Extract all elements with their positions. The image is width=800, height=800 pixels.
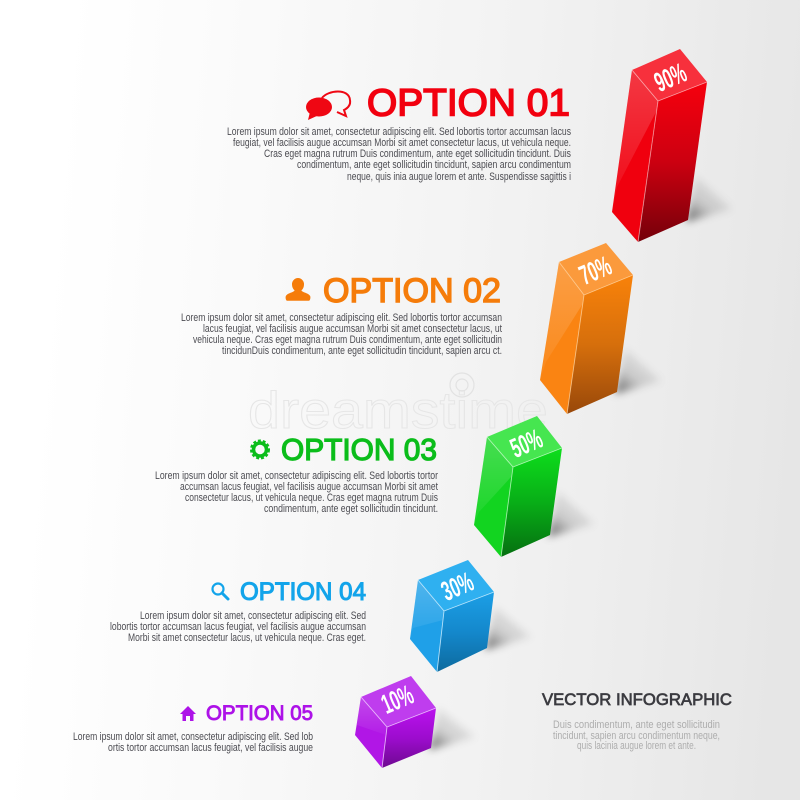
heading: option 03: OPTION 03 xyxy=(281,432,437,467)
text block: vector infographic: quis lacinia augue lorem et ante. xyxy=(577,740,696,752)
text block: option 02 xyxy=(181,312,502,357)
section: option 04 xyxy=(110,578,366,644)
bar: 30% blue xyxy=(410,560,531,672)
text block: option 02: tincidunDuis condimentum, ante eget sollicitudin tincidunt, sapien arcu ct. xyxy=(222,345,502,357)
label: 70%: 70% xyxy=(575,250,616,291)
text block: option 02: vehicula neque. Cras eget magna rutrum Duis condimentum, ante eget sollicitudin xyxy=(193,334,502,346)
section: option 05 xyxy=(73,702,313,754)
icon: house xyxy=(180,706,196,721)
heading: option 01: OPTION 01 xyxy=(367,82,570,124)
text block: vector infographic: tincidunt, sapien arcu condimentum neque, xyxy=(553,730,720,742)
text block: option 04: Morbi sit amet consectetur lacus, ut vehicula neque. Cras eget. xyxy=(128,632,366,644)
text block: option 03: consectetur lacus, ut vehicula neque. Cras eget magna rutrum Duis xyxy=(185,492,438,504)
heading: option 04: OPTION 04 xyxy=(240,578,366,606)
label: 50%: 50% xyxy=(506,423,547,464)
text block: option 03: Lorem ipsum dolor sit amet, consectetur adipiscing elit. Sed lobortis tortor xyxy=(155,470,438,482)
section: option 03 xyxy=(155,432,438,515)
text block: option 03: condimentum, ante eget sollicitudin tincidunt. xyxy=(264,503,438,515)
heading: option 02: OPTION 02 xyxy=(323,272,501,310)
text block: option 03: accumsan lacus feugiat, vel facilisis augue accumsan Morbi sit amet xyxy=(180,481,438,493)
bar: 70% orange xyxy=(540,243,661,414)
heading: option 05: OPTION 05 xyxy=(206,702,313,725)
heading: vector infographic: VECTOR INFOGRAPHIC xyxy=(542,690,732,709)
text block: option 01: feugiat, vel facilisis augue accumsan Morbi sit amet consectetur lacus, ut vehicula neque. xyxy=(233,137,571,149)
icon: magnifier xyxy=(212,584,228,599)
label: 90%: 90% xyxy=(650,57,691,98)
text block: option 05: ortis tortor accumsan lacus feugiat, vel facilisis augue xyxy=(108,742,313,754)
section: option 01 xyxy=(227,82,571,183)
text block: option 01 xyxy=(227,126,571,183)
text block: option 01: Lorem ipsum dolor sit amet, consectetur adipiscing elit. Sed lobortis tortor accumsan lacus xyxy=(227,126,571,138)
bar: 10% purple xyxy=(355,676,475,768)
text block: option 01: Cras eget magna rutrum Duis condimentum, ante eget sollicitudin tincidunt. Duis xyxy=(264,148,571,160)
text block: vector infographic xyxy=(553,719,720,752)
text block: option 04: Lorem ipsum dolor sit amet, consectetur adipiscing elit. Sed xyxy=(140,610,366,622)
text block: option 03 xyxy=(155,470,438,515)
icon: speech bubbles xyxy=(306,92,350,120)
text block: vector infographic: Duis condimentum, ante eget sollicitudin xyxy=(553,719,720,731)
text block: option 05: Lorem ipsum dolor sit amet, consectetur adipiscing elit. Sed lob xyxy=(73,731,313,743)
bar: 90% red xyxy=(612,49,732,242)
text block: option 01: neque, quis inia augue lorem et ante. Suspendisse sagittis i xyxy=(347,171,571,183)
text block: option 04 xyxy=(110,610,366,644)
bar: 50% green xyxy=(474,416,594,557)
text block: option 04: lobortis tortor accumsan lacus feugiat, vel facilisis augue accumsan xyxy=(110,621,366,633)
watermark: dreamstime xyxy=(248,382,548,440)
text block: option 05 xyxy=(73,731,313,754)
label: 30%: 30% xyxy=(437,566,478,607)
text block: option 02: Lorem ipsum dolor sit amet, consectetur adipiscing elit. Sed lobortis tortor accumsan xyxy=(181,312,502,324)
label: 10%: 10% xyxy=(377,679,418,720)
text block: option 01: condimentum, ante eget sollicitudin tincidunt, sapien arcu condimentum xyxy=(297,159,571,171)
text block: option 02: lacus feugiat, vel facilisis augue accumsan Morbi sit amet consectetur lacus, ut xyxy=(203,323,502,335)
icon: person xyxy=(286,278,310,301)
section: option 02 xyxy=(181,272,502,357)
icon: gear xyxy=(251,440,269,458)
